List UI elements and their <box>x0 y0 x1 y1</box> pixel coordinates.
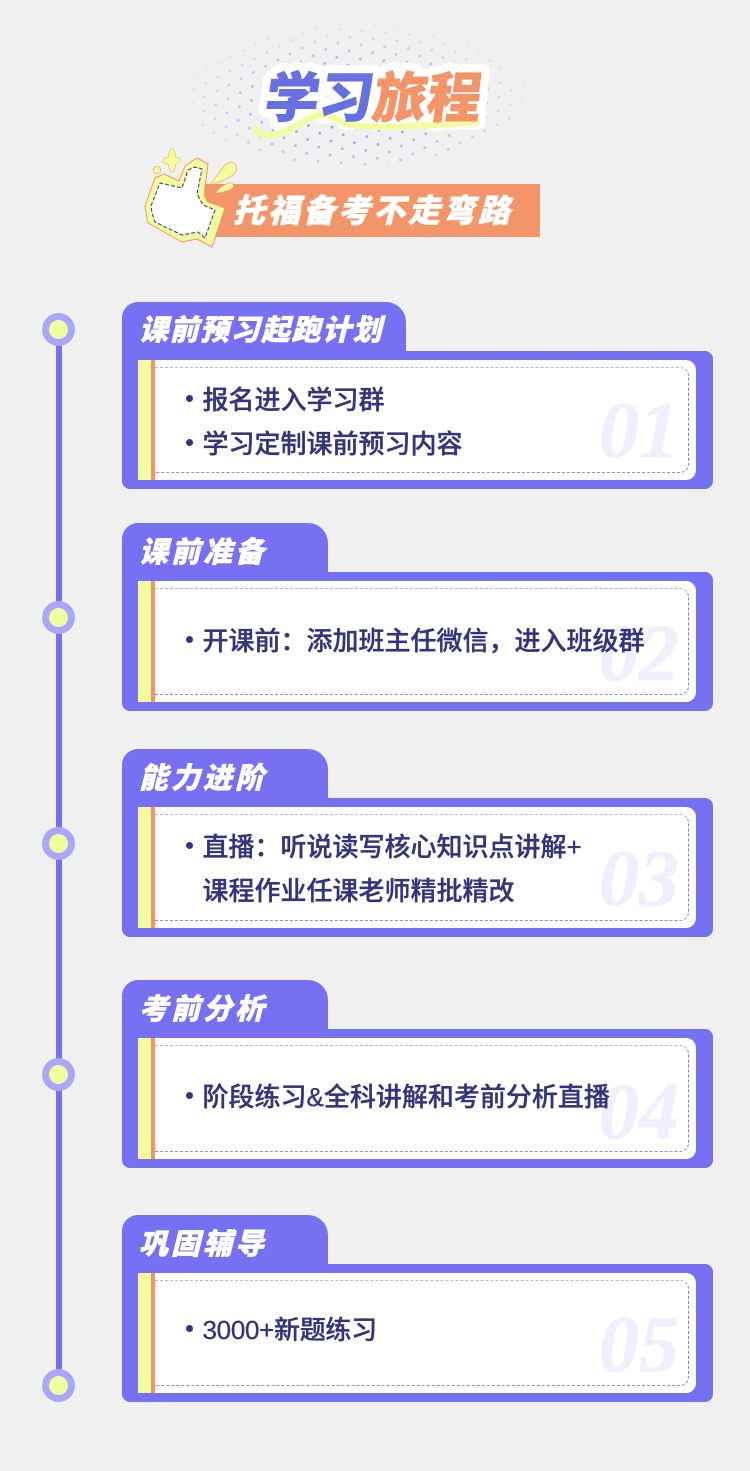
panel: step 3: 直播：听说读写核心知识点讲解+ <box>202 832 582 862</box>
tab: step 2 heading: 课前准备 <box>139 537 267 569</box>
panel: step 1: 报名进入学习群 <box>202 385 385 415</box>
tab: step 3 heading <box>122 749 328 809</box>
tab: step 5 heading: 巩固辅导 <box>139 1229 267 1261</box>
number 05: 05 <box>599 1301 679 1389</box>
title: 学习旅程 <box>261 69 486 129</box>
panel: step 1: 学习定制课前预习内容 <box>202 429 463 459</box>
subtitle banner <box>205 184 540 237</box>
tab: step 3 heading: 能力进阶 <box>139 763 267 795</box>
tab: step 2 heading <box>122 523 328 583</box>
panel: step 4: 阶段练习&全科讲解和考前分析直播 <box>202 1082 610 1112</box>
panel: step 3: 课程作业任课老师精批精改 <box>202 876 515 906</box>
panel: step 2 <box>122 572 713 711</box>
timeline node 1 <box>42 313 75 346</box>
timeline node 4 <box>42 1058 75 1091</box>
number 01: 01 <box>599 387 679 475</box>
bullet: 报名进入学习群 <box>186 385 385 415</box>
timeline line <box>56 330 62 1385</box>
panel: step 3 <box>122 798 713 937</box>
tab: step 4 heading <box>122 980 328 1040</box>
tab: step 1 heading: 课前预习起跑计划 <box>139 315 383 347</box>
tab: step 4 heading: 考前分析 <box>139 994 267 1026</box>
tab: step 5 heading <box>122 1215 328 1275</box>
header decoration: halftone dots <box>180 22 524 166</box>
bullet: 开课前 <box>186 626 645 656</box>
title: 学习旅程 <box>261 69 486 129</box>
tab: step 1 heading <box>122 302 406 362</box>
icon: thumbs up <box>144 148 237 248</box>
bullet: 学习定制课前预习内容 <box>186 429 463 459</box>
panel: step 2: 开课前：添加班主任微信，进入班级群 <box>202 626 645 656</box>
panel: step 5: 3000+新题练习 <box>202 1315 377 1345</box>
timeline node 5 <box>42 1369 75 1402</box>
panel: step 1 <box>122 351 713 489</box>
number 02: 02 <box>599 610 679 698</box>
timeline node 2 <box>42 601 75 634</box>
timeline node 3 <box>42 827 75 860</box>
number 04: 04 <box>599 1068 679 1156</box>
bullet: 3000+新题练习 <box>186 1315 377 1345</box>
number 03: 03 <box>599 835 679 923</box>
panel: step 4 <box>122 1029 713 1168</box>
subtitle text: 托福备考不走弯路 <box>233 193 513 229</box>
bullet: 阶段练习 <box>186 1082 610 1112</box>
panel: step 5 <box>122 1264 713 1402</box>
bullet: 直播 <box>186 832 582 862</box>
